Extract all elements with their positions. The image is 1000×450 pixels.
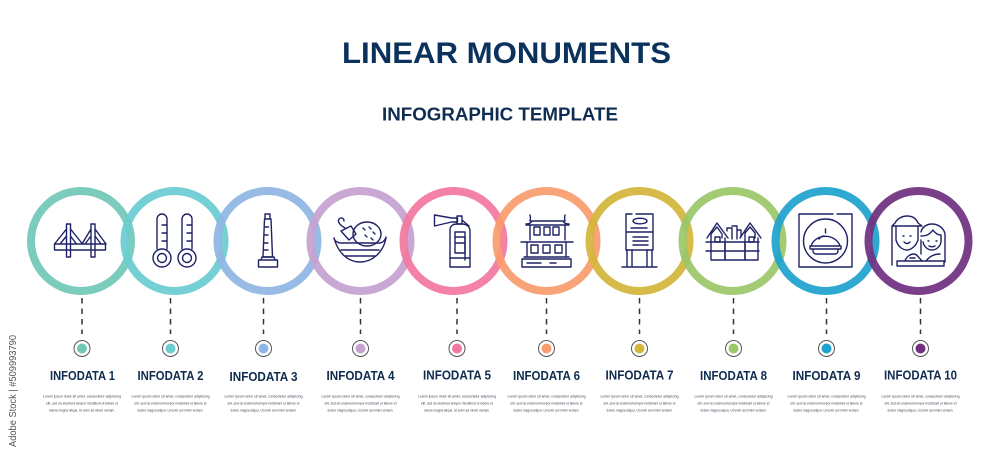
connector 4: [352, 298, 368, 356]
connector 3: [256, 298, 272, 356]
connector 8: [726, 298, 742, 356]
label block 10: Lorem ipsum dolor sit amet, consectetur adipiscing: [882, 394, 960, 398]
label block 7: [600, 368, 678, 412]
label block 8: dolore magna aliqua. Ut enim ad minim veniam.: [700, 408, 766, 412]
label block 3: [224, 369, 302, 412]
icon: two people: [892, 216, 945, 266]
icon: thermometers: [153, 214, 196, 267]
label block 2: elit, sed do eiusmod tempor incididunt ut labore et: [134, 400, 207, 406]
label block 1: Lorem ipsum dolor sit amet, consectetur adipiscing: [43, 394, 121, 398]
ring 3: [218, 191, 318, 291]
connector 9: [818, 298, 834, 356]
label block 4: dolore magna aliqua. Ut enim ad minim veniam.: [328, 408, 394, 412]
icon: obelisk: [258, 214, 278, 267]
connector 6: [538, 298, 554, 356]
label block 6: Lorem ipsum dolor sit amet, consectetur adipiscing: [508, 394, 586, 398]
connector 2: [162, 298, 178, 356]
label block 3: INFODATA 3: [230, 369, 298, 384]
label block 5: INFODATA 5: [423, 368, 491, 382]
icon: bridge: [54, 224, 106, 257]
ring 2: [124, 191, 224, 291]
label block 9: INFODATA 9: [792, 368, 860, 383]
label block 5: elit, sed do eiusmod tempor incididunt ut labore et: [421, 400, 494, 406]
ring 1: [31, 191, 131, 291]
icon: castle: [706, 223, 761, 260]
label block 8: elit, sed do eiusmod tempor incididunt ut labore et: [698, 400, 770, 406]
label block 9: Lorem ipsum dolor sit amet, consectetur adipiscing: [788, 394, 866, 398]
icon: pagoda: [521, 215, 573, 267]
label block 7: dolore magna aliqua. Ut enim ad minim veniam.: [606, 408, 672, 412]
label block 9: [788, 368, 866, 412]
label block 3: dolore magna aliqua. Ut enim ad minim veniam.: [230, 408, 296, 412]
label block 10: INFODATA 10: [884, 368, 957, 382]
label block 4: [322, 368, 400, 412]
label block 9: elit, sed do eiusmod tempor incididunt ut labore et: [790, 400, 863, 406]
label block 9: dolore magna aliqua. Ut enim ad minim veniam.: [794, 408, 860, 412]
label block 2: INFODATA 2: [138, 368, 204, 383]
label block 10: dolore magna aliqua. Ut enim ad minim veniam.: [888, 408, 954, 412]
stock id side text: Adobe Stock | #509993790: [8, 335, 19, 447]
ring 10: [868, 191, 968, 291]
connector 10: [912, 298, 928, 356]
ring 4: [310, 191, 410, 291]
label block 2: dolore magna aliqua. Ut enim ad minim veniam.: [138, 408, 204, 412]
ring 5: [404, 191, 504, 291]
icon: plate with cloche: [799, 214, 852, 267]
ring 7: [590, 191, 690, 291]
label block 2: Lorem ipsum dolor sit amet, consectetur adipiscing: [132, 394, 210, 398]
label block 7: Lorem ipsum dolor sit amet, consectetur adipiscing: [600, 394, 678, 398]
label block 1: elit, sed do eiusmod tempor incididunt ut labore et: [46, 400, 119, 406]
label block 8: [694, 368, 772, 412]
connector 7: [632, 298, 648, 356]
label block 4: Lorem ipsum dolor sit amet, consectetur adipiscing: [322, 394, 400, 398]
label block 4: INFODATA 4: [326, 368, 395, 383]
label block 5: Lorem ipsum dolor sit amet, consectetur adipiscing: [418, 394, 496, 398]
label block 8: INFODATA 8: [700, 368, 767, 383]
ring 8: [682, 191, 782, 291]
label block 3: Lorem ipsum dolor sit amet, consectetur adipiscing: [224, 394, 302, 398]
label block 2: [132, 368, 210, 412]
title: LINEAR MONUMENTS: [342, 37, 671, 70]
icon: monument board: [622, 214, 657, 267]
label block 10: elit, sed do eiusmod tempor incididunt ut labore et: [884, 400, 957, 406]
label block 6: dolore magna aliqua. Ut enim ad minim veniam.: [514, 408, 580, 412]
label block 1: INFODATA 1: [50, 368, 115, 383]
label block 8: Lorem ipsum dolor sit amet, consectetur adipiscing: [694, 394, 772, 398]
icon: fire extinguisher: [434, 215, 470, 267]
label block 7: elit, sed do eiusmod tempor incididunt ut labore et: [604, 400, 676, 406]
label block 4: elit, sed do eiusmod tempor incididunt ut labore et: [324, 400, 397, 406]
label block 1: dolore magna aliqua. Ut enim ad minim veniam.: [49, 408, 115, 412]
label block 6: INFODATA 6: [513, 368, 580, 383]
label block 1: [43, 368, 121, 412]
ring 9: [776, 191, 876, 291]
label block 5: dolore magna aliqua. Ut enim ad minim veniam.: [424, 408, 490, 412]
label block 6: elit, sed do eiusmod tempor incididunt ut labore et: [510, 400, 583, 406]
label block 5: [418, 368, 496, 412]
ring 6: [496, 191, 596, 291]
connector 5: [449, 298, 465, 356]
label block 7: INFODATA 7: [606, 368, 674, 382]
connector 1: [74, 298, 90, 356]
label block 10: [882, 368, 960, 412]
icon: bowl of food: [334, 218, 386, 262]
label block 6: [508, 368, 586, 412]
label block 3: elit, sed do eiusmod tempor incididunt ut labore et: [228, 400, 300, 406]
subtitle: INFOGRAPHIC TEMPLATE: [382, 104, 618, 124]
